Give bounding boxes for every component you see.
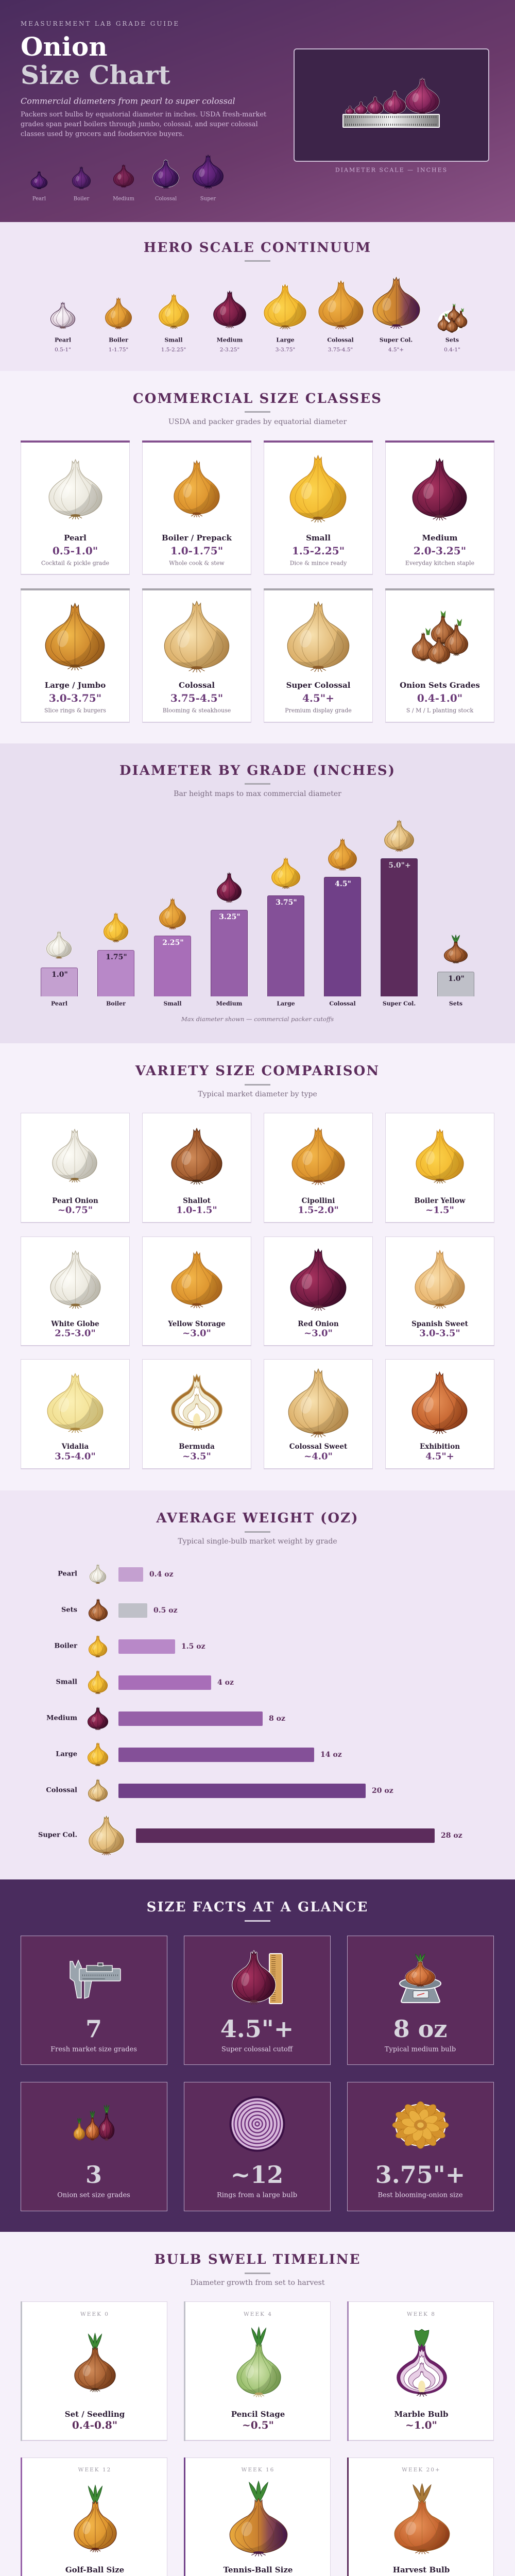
card: week 20+ (347, 2458, 494, 2576)
value: ~12 (231, 2161, 283, 2189)
eyebrow: MEASUREMENT LAB GRADE GUIDE (21, 20, 180, 27)
diameter: 3.75-4.5" (170, 692, 223, 704)
value: 7 (85, 2015, 102, 2043)
label: super: Super (200, 196, 216, 202)
bar: sets (437, 972, 474, 996)
heading: VARIETY SIZE COMPARISON (135, 1063, 380, 1079)
card: colossal (142, 588, 251, 723)
name: Small (306, 533, 331, 543)
bar: medium (118, 1711, 263, 1726)
bar: colossal (118, 1784, 366, 1798)
icon: marble bulb cross section (397, 2329, 447, 2397)
icon: kitchen scale (399, 1953, 442, 2003)
note: S / M / L planting stock (406, 707, 473, 714)
label: small: Small (163, 1001, 182, 1007)
icon: onion sets cluster (412, 611, 469, 665)
icon: large onion (45, 603, 105, 671)
card: week 0 (21, 2301, 167, 2441)
name: Pearl (64, 533, 87, 543)
icon: bermuda cut onion (171, 1375, 222, 1431)
labels: small: Small (164, 337, 183, 343)
card: cipollini (264, 1113, 373, 1223)
diameter: ~3.0" (304, 1328, 333, 1338)
labels: colossal: Colossal (327, 337, 354, 343)
card: large (21, 588, 130, 723)
week: WEEK 12 (78, 2467, 111, 2473)
heading: DIAMETER BY GRADE (INCHES) (119, 763, 396, 778)
name: Marble Bulb (394, 2410, 448, 2419)
range: pearl: 0.5-1" (55, 347, 71, 353)
card: week 4 (184, 2301, 331, 2441)
card: exhibition (385, 1359, 494, 1469)
diameter: 0.4-0.8" (72, 2419, 117, 2431)
bar: pearl: 1.0" (52, 971, 68, 979)
icon: sets onion (444, 935, 468, 963)
value: boiler: 1.5 oz (181, 1642, 205, 1651)
card: week 16 (184, 2458, 331, 2576)
intro paragraph: grades span pearl boilers through jumbo, colossal, and super colossal (21, 121, 258, 128)
card: spanish sweet (385, 1236, 494, 1346)
icon: pearl (50, 302, 75, 329)
card: yellow storage (142, 1236, 251, 1346)
name: Harvest Bulb (393, 2565, 450, 2574)
diameter: 0.5-1.0" (53, 545, 98, 557)
note: Cocktail & pickle grade (41, 560, 109, 567)
value: 4.5"+ (220, 2015, 294, 2043)
icon: caliper (69, 1960, 121, 1999)
name: Medium (422, 533, 458, 543)
panel: hero scale continuum (0, 222, 515, 371)
bar: colossal (324, 877, 361, 996)
range: colossal: 3.75-4.5" (328, 347, 353, 353)
value: pearl: 0.4 oz (149, 1570, 174, 1579)
icon: boiler yellow (416, 1128, 464, 1184)
label: Rings from a large bulb (217, 2192, 297, 2199)
icon: pearl onion (46, 931, 72, 959)
label: super colossal: Super Col. (383, 1001, 416, 1007)
name: Set / Seedling (65, 2410, 125, 2419)
label: small: Small (56, 1679, 77, 1686)
label: boiler: Boiler (54, 1642, 77, 1650)
icon: shallot (171, 1127, 222, 1185)
icon: mini colossal onion (152, 159, 179, 189)
icon: medium onion (412, 457, 467, 520)
icon: colossal sweet (288, 1369, 349, 1437)
card: shallot (142, 1113, 251, 1223)
icon: large (88, 1743, 108, 1766)
icon: super colossal (89, 1816, 124, 1855)
icon: golf-ball onion (74, 2485, 117, 2552)
range: small: 1.5-2.25" (161, 347, 186, 353)
name: Super Colossal (286, 681, 350, 690)
card: red onion (264, 1236, 373, 1346)
bar: pearl (118, 1567, 143, 1582)
value: sets: 0.5 oz (153, 1606, 178, 1615)
icon: colossal onion (164, 601, 230, 673)
title: Size Chart (21, 60, 170, 90)
card: week 8 (347, 2301, 494, 2441)
icon: boiler onion (103, 912, 129, 943)
subtitle: Commercial diameters from pearl to super colossal (21, 96, 235, 106)
name: Large / Jumbo (45, 681, 106, 690)
label: super colossal: Super Col. (38, 1831, 77, 1839)
week: WEEK 16 (242, 2467, 274, 2473)
name: Golf-Ball Size (65, 2565, 124, 2574)
icon: exhibition (411, 1372, 468, 1434)
fact card: rings (184, 2082, 331, 2211)
diameter: 2.0-3.25" (414, 545, 466, 557)
bar chart (41, 819, 474, 1007)
diameter: 4.5"+ (302, 692, 334, 704)
icon: red onion (290, 1248, 346, 1311)
bar: small: 2.25" (162, 939, 184, 947)
note: Blooming & steakhouse (163, 707, 231, 714)
name: Spanish Sweet (411, 1320, 468, 1328)
icon: yellow storage (171, 1251, 222, 1309)
panel: variety size comparison (0, 1043, 515, 1490)
card: boiler yellow (385, 1113, 494, 1223)
card: bermuda (142, 1359, 251, 1469)
icon: large onion (271, 857, 301, 889)
bar: large: 3.75" (276, 899, 297, 907)
icon: sets (89, 1599, 108, 1621)
bar: small (154, 936, 191, 996)
label: pearl: Pearl (32, 196, 46, 202)
name: Red Onion (298, 1320, 339, 1328)
icon: colossal (318, 280, 364, 330)
label: large: Large (277, 1001, 295, 1007)
name: Exhibition (420, 1443, 460, 1451)
card: super colossal (264, 588, 373, 723)
value: colossal: 20 oz (372, 1787, 393, 1795)
fact card: blooming onion size (347, 2082, 494, 2211)
diameter: 1.0-1.5" (176, 1205, 217, 1216)
bar: super colossal (136, 1828, 435, 1843)
subheading: USDA and packer grades by equatorial diameter (168, 418, 347, 426)
title: Onion (21, 31, 108, 62)
diameter: 3.0-3.5" (419, 1328, 460, 1338)
label: medium: Medium (216, 1001, 242, 1007)
note: Everyday kitchen staple (405, 560, 474, 567)
icon: blooming onion (393, 2102, 448, 2147)
icon: white globe (50, 1250, 101, 1309)
panel: diameter scale illustration (294, 48, 489, 162)
heading: SIZE FACTS AT A GLANCE (147, 1900, 368, 1915)
bar: medium (211, 910, 248, 996)
name: Colossal Sweet (289, 1443, 347, 1451)
diameter: 1.0-1.75" (170, 545, 223, 557)
week: WEEK 8 (407, 2311, 436, 2317)
name: White Globe (51, 1320, 99, 1328)
label: medium: Medium (113, 196, 134, 202)
note: Whole cook & stew (169, 560, 225, 567)
diameter: 3.0-3.75" (49, 692, 101, 704)
label: boiler: Boiler (74, 196, 89, 202)
name: Pencil Stage (231, 2410, 285, 2419)
icon: medium (213, 291, 246, 329)
name: Tennis-Ball Size (224, 2565, 293, 2574)
icon: mini medium onion (113, 164, 134, 188)
card: pearl (21, 440, 130, 575)
card: colossal sweet (264, 1359, 373, 1469)
icon: super colossal onion (384, 819, 414, 852)
icon: harvest bulb (394, 2484, 450, 2554)
icon: boiler (89, 1636, 107, 1657)
diameter: 2.5-3.0" (55, 1328, 96, 1338)
labels: large: Large (276, 337, 295, 343)
labels: pearl: Pearl (55, 337, 71, 343)
icon: super colossal (372, 276, 420, 329)
fact card: grades (21, 1936, 167, 2065)
icon: set onion (74, 2333, 116, 2392)
bar: sets (118, 1603, 147, 1618)
label: boiler: Boiler (106, 1001, 126, 1007)
icon: small (158, 294, 190, 329)
panel: average weight (0, 1490, 515, 1879)
value: small: 4 oz (217, 1679, 234, 1687)
icon: mini super onion (193, 155, 224, 189)
subheading: Typical market diameter by type (198, 1090, 317, 1098)
week: WEEK 20+ (402, 2467, 441, 2473)
icon: onions on a ruler (342, 78, 440, 128)
diameter: ~0.5" (242, 2419, 274, 2431)
diameter: ~3.0" (182, 1328, 211, 1338)
label: sets: Sets (61, 1606, 77, 1614)
bar: medium: 3.25" (219, 913, 241, 921)
intro paragraph: Packers sort bulbs by equatorial diameter in inches. USDA fresh-market (21, 111, 266, 118)
labels: super colossal: Super Col. (380, 337, 413, 343)
bar: boiler: 1.75" (106, 953, 127, 961)
subheading: Diameter growth from set to harvest (191, 2279, 324, 2287)
label: colossal: Colossal (155, 196, 177, 202)
card: medium (385, 440, 494, 575)
range: medium: 2-3.25" (220, 347, 239, 353)
bar: super colossal (381, 858, 418, 996)
bar: pearl (41, 968, 78, 996)
name: Cipollini (302, 1197, 335, 1205)
icon: medium onion (216, 872, 242, 903)
intro paragraph (21, 111, 267, 138)
diameter: ~1.5" (425, 1205, 454, 1216)
label: Super colossal cutoff (221, 2045, 293, 2054)
name: Boiler / Prepack (162, 533, 232, 543)
icon: tennis-ball onion (229, 2481, 288, 2556)
icon: pearl onion (48, 459, 102, 519)
caption: diameter scale: DIAMETER SCALE — INCHES (335, 167, 448, 173)
intro paragraph: classes used by grocers and foodservice buyers. (21, 130, 184, 138)
icon: spanish sweet (415, 1250, 465, 1309)
diameter: 4.5"+ (425, 1451, 454, 1462)
name: Vidalia (62, 1443, 89, 1451)
icon: small onion (159, 897, 186, 929)
icon: sets (438, 303, 468, 333)
name: Pearl Onion (52, 1197, 98, 1205)
card: boiler (142, 440, 251, 575)
name: Yellow Storage (168, 1320, 226, 1328)
icon: colossal (88, 1780, 108, 1802)
bar: large (267, 895, 304, 996)
card: white globe (21, 1236, 130, 1346)
icon: large (264, 283, 307, 330)
label: Typical medium bulb (385, 2045, 456, 2054)
icon: pencil stage (236, 2327, 281, 2397)
range: sets: 0.4-1" (444, 347, 460, 353)
heading: HERO SCALE CONTINUUM (144, 240, 371, 256)
diameter: ~1.0" (405, 2419, 437, 2431)
icon: onion rings cross section (229, 2096, 285, 2152)
icon: small onion (289, 454, 346, 522)
value: large: 14 oz (320, 1751, 342, 1759)
label: colossal: Colossal (46, 1787, 77, 1794)
panel: header (0, 0, 515, 222)
value: 8 oz (393, 2015, 447, 2043)
heading: COMMERCIAL SIZE CLASSES (133, 391, 382, 406)
icon: vidalia (47, 1374, 104, 1433)
label: large: Large (56, 1751, 77, 1758)
label: sets: Sets (449, 1001, 462, 1007)
week: WEEK 4 (244, 2311, 272, 2317)
labels: medium: Medium (217, 337, 243, 343)
fact card: medium bulb (347, 1936, 494, 2065)
bar: boiler (97, 950, 134, 996)
icon: mini boiler onion (72, 166, 91, 190)
label: Onion set size grades (57, 2192, 130, 2199)
label: Fresh market size grades (50, 2045, 137, 2054)
value: 3.75"+ (375, 2161, 465, 2189)
icon: three sprouted onions (73, 2105, 115, 2141)
value: medium: 8 oz (269, 1715, 285, 1723)
icon: super colossal onion (287, 601, 349, 672)
value: 3 (85, 2161, 102, 2189)
subheading: Bar height maps to max commercial diameter (174, 790, 341, 798)
name: Onion Sets Grades (400, 681, 480, 690)
caption: Max diameter shown — commercial packer cutoffs (181, 1015, 334, 1023)
labels: boiler: Boiler (109, 337, 128, 343)
diameter: 1.5-2.0" (298, 1205, 339, 1216)
icon: colossal onion (328, 838, 357, 871)
icon: boiler (105, 297, 132, 330)
diameter: 1.5-2.25" (292, 545, 345, 557)
name: Boiler Yellow (414, 1197, 466, 1205)
title (21, 31, 170, 90)
diameter: ~3.5" (182, 1451, 211, 1462)
card: small (264, 440, 373, 575)
card: pearl onion (21, 1113, 130, 1223)
range: boiler: 1-1.75" (109, 347, 128, 353)
panel: size facts at a glance (0, 1879, 515, 2232)
icon: mini pearl onion (31, 171, 47, 190)
range: super colossal: 4.5"+ (388, 347, 404, 353)
icon: pearl onion (52, 1128, 97, 1183)
card: onion sets (385, 588, 494, 723)
name: Bermuda (179, 1443, 215, 1451)
icon: pearl (90, 1565, 106, 1584)
card: vidalia (21, 1359, 130, 1469)
bar: large (118, 1748, 314, 1762)
panel: diameter by grade (0, 743, 515, 1043)
label: colossal: Colossal (329, 1001, 356, 1007)
card: week 12 (21, 2458, 167, 2576)
bar: small (118, 1675, 211, 1690)
label: pearl: Pearl (51, 1001, 67, 1007)
name: Shallot (183, 1197, 211, 1205)
diameter: 0.4-1.0" (417, 692, 462, 704)
icon: medium (88, 1707, 108, 1730)
note: Dice & mince ready (290, 560, 347, 567)
panel: commercial size classes (0, 371, 515, 743)
fact card: set grades (21, 2082, 167, 2211)
bar: super colossal: 5.0"+ (388, 861, 411, 870)
note: Premium display grade (285, 707, 352, 714)
label: medium: Medium (46, 1715, 77, 1722)
icon: boiler onion (174, 460, 220, 517)
range: large: 3-3.75" (276, 347, 295, 353)
label: pearl: Pearl (58, 1570, 77, 1578)
heading: AVERAGE WEIGHT (OZ) (156, 1511, 359, 1526)
panel: bulb swell timeline (0, 2232, 515, 2576)
note: Slice rings & burgers (44, 707, 106, 714)
subheading: Typical single-bulb market weight by grade (178, 1537, 337, 1546)
icon: small (88, 1671, 108, 1694)
bar: colossal: 4.5" (335, 880, 351, 888)
bar: boiler (118, 1639, 175, 1654)
fact card: super colossal cutoff (184, 1936, 331, 2065)
icon: onion and ruler (232, 1951, 282, 2005)
labels: sets: Sets (445, 337, 459, 343)
diameter: 3.5-4.0" (55, 1451, 96, 1462)
icon: cipollini (291, 1127, 345, 1185)
label: Best blooming-onion size (377, 2192, 463, 2199)
name: Colossal (179, 681, 215, 690)
week: WEEK 0 (80, 2311, 109, 2317)
bar: sets: 1.0" (448, 975, 465, 983)
value: super colossal: 28 oz (441, 1832, 462, 1840)
diameter: ~4.0" (304, 1451, 333, 1462)
diameter: ~0.75" (58, 1205, 93, 1216)
heading: BULB SWELL TIMELINE (154, 2252, 361, 2267)
